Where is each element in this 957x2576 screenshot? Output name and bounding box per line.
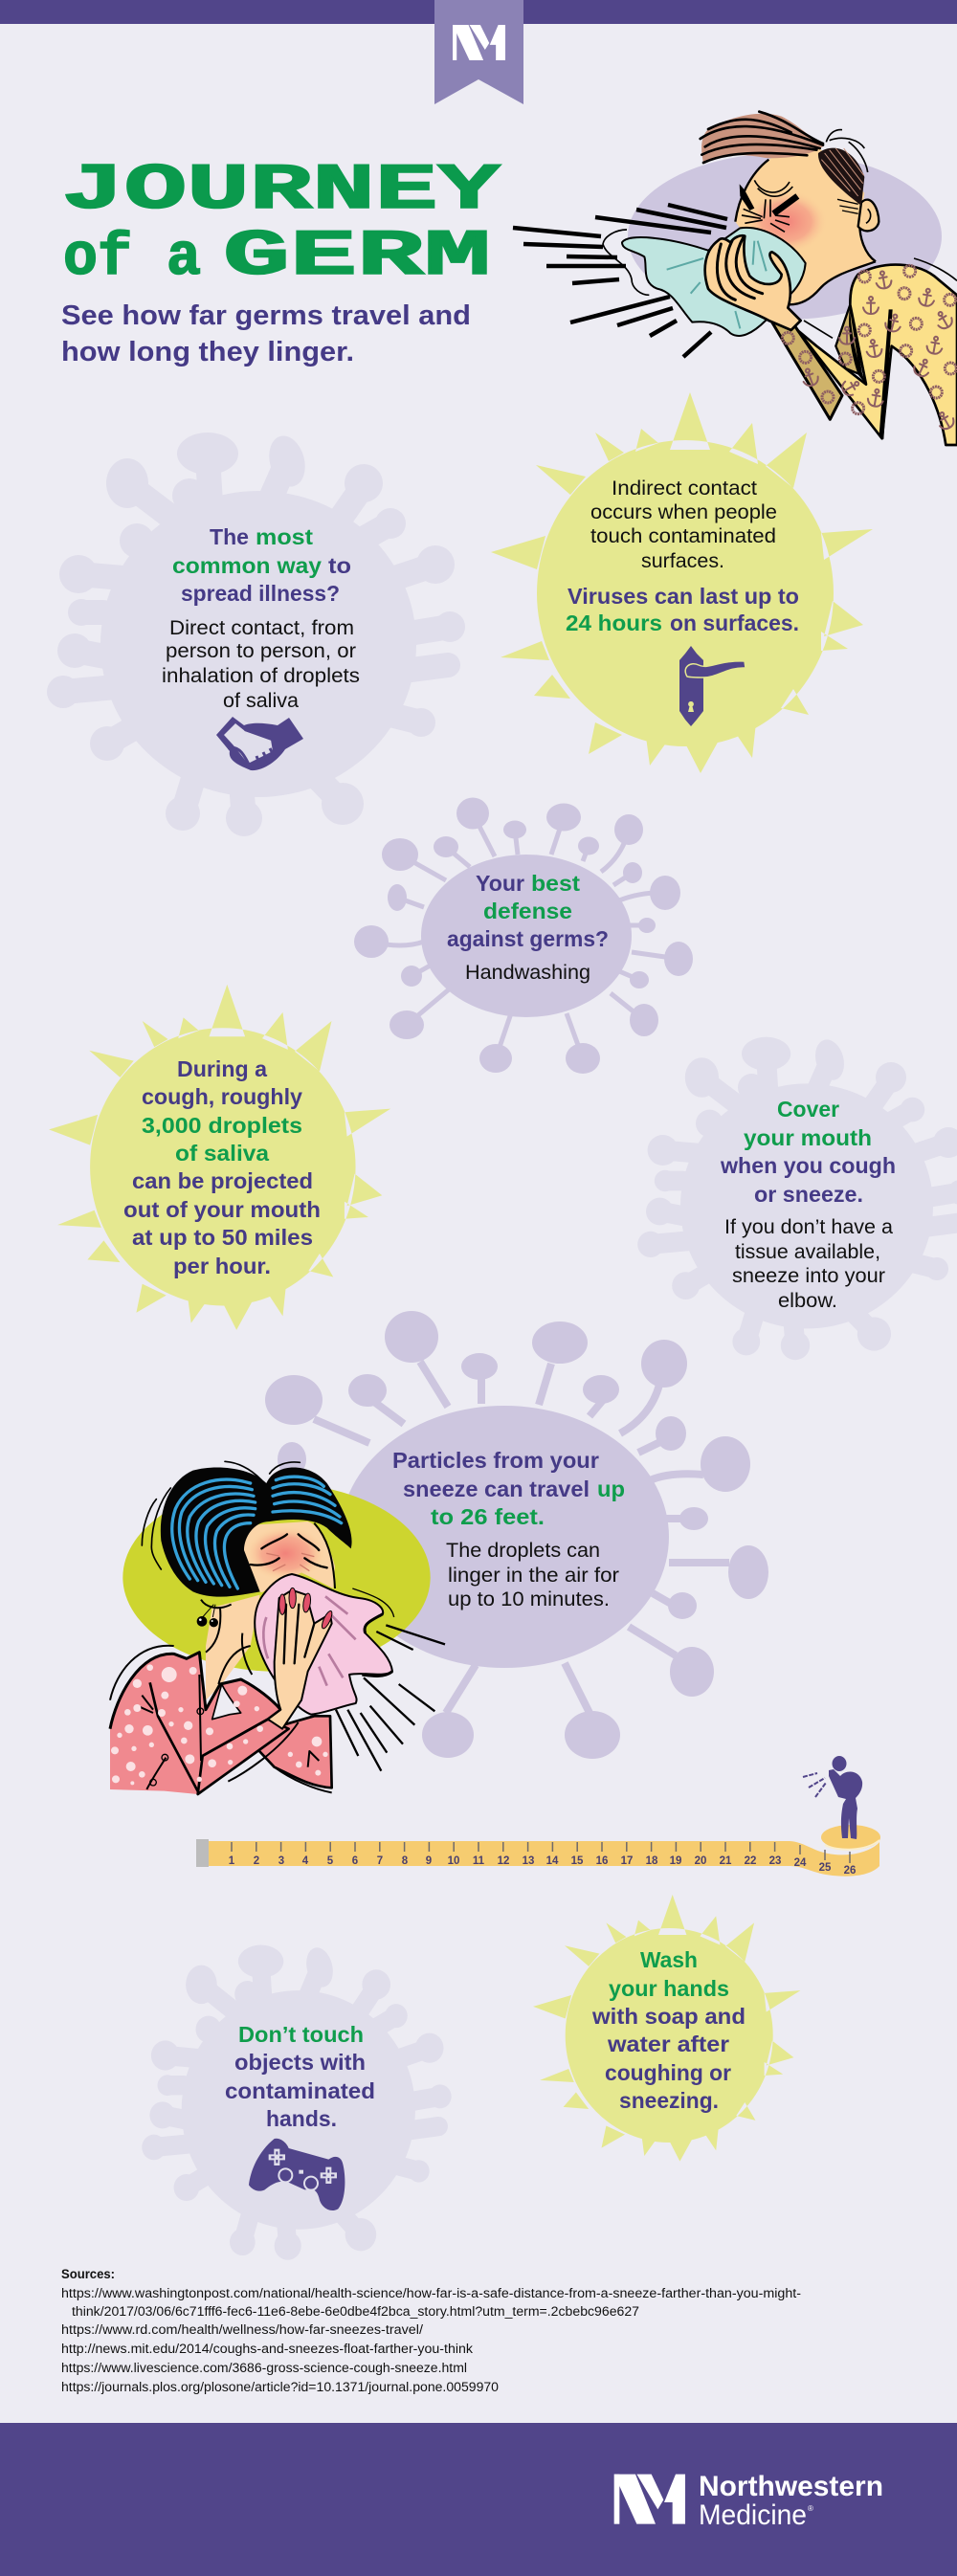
text block: contaminated (225, 2078, 375, 2103)
heading: most (256, 524, 313, 549)
body text: up to 10 minutes. (448, 1588, 610, 1610)
measuring tape: 3 (278, 1855, 284, 1867)
measuring tape: 18 (646, 1855, 658, 1867)
measuring tape: 10 (448, 1855, 459, 1867)
heading (172, 524, 351, 606)
measuring tape: 23 (769, 1855, 781, 1867)
heading: common way (172, 553, 322, 578)
heading: or sneeze. (754, 1182, 863, 1207)
title (61, 154, 501, 294)
measuring tape: 8 (402, 1855, 409, 1867)
sources: https://www.rd.com/health/wellness/how-far-sneezes-travel/ (61, 2322, 423, 2337)
heading (720, 1097, 896, 1207)
sources: https://journals.plos.org/plosone/article?id=10.1371/journal.pone.0059970 (61, 2380, 499, 2394)
body text: elbow. (778, 1290, 837, 1312)
body text (590, 477, 777, 572)
measuring tape: 9 (426, 1855, 432, 1867)
measuring tape: 15 (571, 1855, 584, 1867)
footer logo: Medicine (699, 2499, 807, 2531)
measuring tape: 20 (695, 1855, 706, 1867)
title: GERM (223, 220, 491, 294)
text block: out of your mouth (123, 1197, 321, 1222)
sources: https://www.washingtonpost.com/national/health-science/how-far-is-a-safe-distance-from-a-sneeze-farther-than-you-might- (61, 2286, 801, 2300)
body text: surfaces. (641, 550, 724, 572)
measuring tape: 16 (596, 1855, 608, 1867)
title: JOURNEY (61, 154, 501, 228)
sources: https://www.livescience.com/3686-gross-science-cough-sneeze.html (61, 2361, 467, 2375)
body text (724, 1216, 893, 1312)
measuring tape: 12 (498, 1855, 509, 1867)
measuring tape: 25 (819, 1862, 832, 1874)
heading: Cover (777, 1097, 839, 1121)
body text: Handwashing (465, 962, 590, 984)
text block: hands. (266, 2106, 337, 2131)
heading: 24 hours (566, 611, 662, 635)
icon: coughing figure (803, 1756, 862, 1839)
icon: door handle (679, 646, 746, 726)
text block: sneezing. (619, 2088, 719, 2113)
body text: If you don’t have a (724, 1216, 893, 1238)
heading: spread illness? (181, 581, 340, 606)
panel: cover your mouth (637, 1036, 957, 1360)
heading: Particles from your (392, 1448, 599, 1473)
measuring tape: 7 (377, 1855, 383, 1867)
measuring tape: 22 (745, 1855, 756, 1867)
body text: Indirect contact (612, 477, 757, 500)
large germ (265, 1311, 768, 1759)
measuring tape: 4 (302, 1855, 309, 1867)
panel: best defense (354, 798, 693, 1074)
body text: tissue available, (735, 1241, 880, 1263)
text block: During a (177, 1056, 267, 1081)
title: of a (63, 224, 201, 292)
subtitle: See how far germs travel and (61, 300, 471, 331)
heading: up (597, 1477, 625, 1501)
measuring tape: 14 (546, 1855, 559, 1867)
measuring tape (196, 1825, 880, 1876)
measuring tape: 2 (254, 1855, 259, 1867)
measuring tape: 19 (670, 1855, 681, 1867)
text block (123, 1056, 321, 1278)
heading: your mouth (744, 1125, 872, 1150)
body text: sneeze into your (732, 1265, 885, 1287)
text block: Wash (640, 1947, 698, 1972)
sources (61, 2267, 801, 2394)
footer (0, 2423, 957, 2576)
text block: coughing or (605, 2060, 731, 2085)
panel: wash hands (533, 1895, 800, 2162)
illustration: sneezing man (513, 112, 957, 445)
heading: best (531, 871, 580, 896)
text block: at up to 50 miles (132, 1225, 313, 1250)
body text: of saliva (223, 690, 299, 712)
text block: Don’t touch (238, 2022, 364, 2047)
heading (447, 871, 609, 951)
text block: cough, roughly (142, 1084, 302, 1109)
body text: inhalation of droplets (162, 665, 360, 687)
panel: cough droplets (49, 985, 390, 1330)
heading: sneeze can travel (403, 1477, 590, 1501)
measuring tape: 5 (327, 1855, 334, 1867)
heading: to 26 feet. (431, 1504, 545, 1529)
panel: sneeze particles (110, 1311, 768, 1794)
text block: water after (607, 2032, 729, 2056)
measuring tape: 13 (523, 1855, 534, 1867)
text block: per hour. (173, 1254, 271, 1278)
body text: Direct contact, from (169, 617, 354, 639)
measuring tape: 1 (229, 1855, 235, 1867)
icon: game controller (249, 2139, 345, 2210)
text block (225, 2022, 375, 2131)
measuring tape: 26 (844, 1865, 856, 1876)
footer logo (614, 2471, 883, 2531)
text block: your hands (609, 1976, 729, 2001)
sources: http://news.mit.edu/2014/coughs-and-sneezes-float-farther-you-think (61, 2342, 473, 2356)
text block: 3,000 droplets (142, 1113, 302, 1138)
text block: of saliva (175, 1141, 269, 1166)
measuring tape: 11 (473, 1855, 485, 1867)
sources: Sources: (61, 2267, 115, 2281)
panel: indirect contact (491, 392, 873, 773)
heading: defense (483, 899, 572, 923)
heading: against germs? (447, 926, 609, 951)
body text: occurs when people (590, 501, 777, 523)
heading: The (210, 524, 249, 549)
subtitle (61, 300, 471, 367)
icon: handshake (216, 717, 303, 770)
footer logo: ® (808, 2504, 813, 2513)
panel: don't touch (142, 1944, 452, 2260)
measuring tape: 21 (720, 1855, 732, 1867)
body text (446, 1540, 619, 1610)
header bar (0, 0, 957, 24)
text block (591, 1947, 746, 2113)
subtitle: how long they linger. (61, 337, 354, 367)
heading (566, 584, 799, 635)
heading: when you cough (720, 1153, 896, 1178)
text block: can be projected (132, 1168, 313, 1193)
panel: most common way (47, 432, 465, 836)
heading (392, 1448, 625, 1529)
body text: touch contaminated (590, 525, 776, 547)
heading: to (328, 553, 351, 578)
body text: person to person, or (166, 640, 356, 662)
body text (162, 617, 360, 712)
measuring tape: 24 (794, 1857, 807, 1869)
heading: Your (476, 871, 524, 896)
heading: on surfaces. (670, 611, 799, 635)
measuring tape: 17 (621, 1855, 633, 1867)
text block: with soap and (591, 2004, 746, 2029)
ribbon logo (434, 0, 523, 104)
body text: linger in the air for (448, 1565, 619, 1587)
sources: think/2017/03/06/6c71fff6-fec6-11e6-8ebe-6e0dbe4f2bca_story.html?utm_term=.2cbebc96e627 (72, 2304, 639, 2319)
illustration: sneezing woman (110, 1461, 445, 1794)
footer logo: Northwestern (699, 2471, 883, 2502)
measuring tape: 6 (352, 1855, 358, 1867)
heading: Viruses can last up to (568, 584, 799, 609)
text block: objects with (234, 2050, 366, 2075)
body text: The droplets can (446, 1540, 600, 1562)
